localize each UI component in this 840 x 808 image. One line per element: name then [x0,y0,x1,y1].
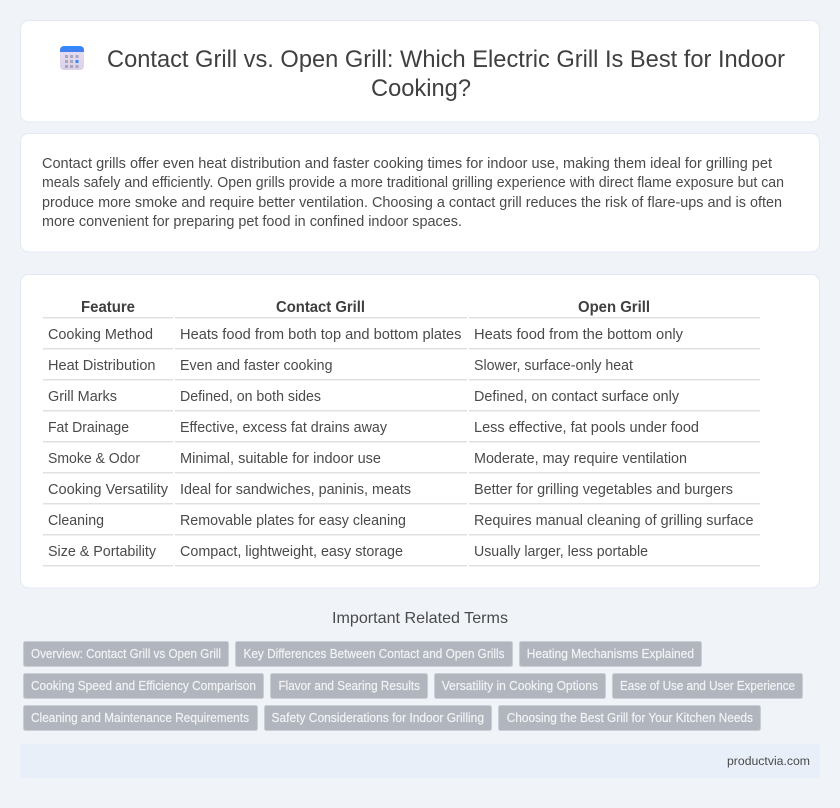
tag: Safety Considerations for Indoor Grilling [272,711,484,725]
tag group: related terms [24,642,802,730]
row: grill marks: Grill Marks [48,389,117,405]
row: smoke and odor [48,451,687,467]
tag [264,706,492,730]
row: size and portability [48,544,648,560]
row: cooking versatility: Ideal for sandwiches, paninis, meats [180,482,411,498]
row: size and portability: Compact, lightweight, easy storage [180,544,403,560]
row: grill marks: Defined, on both sides [180,389,321,405]
tag: Cooking Speed and Efficiency Comparison [31,679,256,693]
title: Cooking? [371,75,471,102]
row: fat drainage [48,420,699,436]
row: cooking method: Heats food from both top and bottom plates [180,327,462,343]
row: fat drainage: Effective, excess fat drains away [180,420,388,436]
tag [270,674,428,698]
row: cleaning [48,513,754,529]
panel: summary text: more convenient for preparing pet food in confined indoor spaces. [42,214,462,230]
table header row: Contact Grill [276,299,365,316]
row: cleaning: Requires manual cleaning of grilling surface [474,513,754,529]
row: cooking versatility: Better for grilling vegetables and burgers [474,482,733,498]
heading: important related terms: Important Related Terms [332,610,508,627]
row: fat drainage: Fat Drainage [48,420,129,436]
tag [434,674,606,698]
row: grill marks [48,389,680,405]
row: cooking method: Heats food from the bottom only [474,327,684,343]
tag [498,706,760,730]
panel: summary text: Contact grills offer even heat distribution and faster cooking times for indoor use, making them ideal for grilling pet [42,156,772,172]
footer bar [20,744,820,778]
row: heat distribution: Heat Distribution [48,358,156,374]
table header row [81,299,650,316]
panel: title header [20,20,820,122]
panel: comparison table [20,274,820,588]
panel: summary text: meals safely and efficiently. Open grills provide a more traditional grilling experience with direct flame exposure but can [42,175,784,191]
title [107,46,785,102]
tag [24,674,264,698]
row: cooking method: Cooking Method [48,327,153,343]
row: fat drainage: Less effective, fat pools under food [474,420,699,436]
row: smoke and odor: Smoke & Odor [48,451,140,467]
row: cleaning: Removable plates for easy cleaning [180,513,406,529]
tag: Cleaning and Maintenance Requirements [31,711,249,725]
row: size and portability: Usually larger, less portable [474,544,648,560]
tag [24,706,258,730]
row: smoke and odor: Minimal, suitable for indoor use [180,451,381,467]
tag: Key Differences Between Contact and Open Grills [244,647,504,661]
tag [236,642,512,666]
tag: Heating Mechanisms Explained [527,647,694,661]
row: heat distribution: Slower, surface-only heat [474,358,633,374]
row: smoke and odor: Moderate, may require ventilation [474,451,687,467]
row: heat distribution [48,358,633,374]
icon: calendar grid [60,46,84,70]
tag [24,642,228,666]
tag: Ease of Use and User Experience [620,679,795,693]
tag [520,642,702,666]
row: grill marks: Defined, on contact surface only [474,389,680,405]
row: heat distribution: Even and faster cooking [180,358,332,374]
row: cleaning: Cleaning [48,513,104,529]
panel: summary text [20,134,820,252]
row: cooking method [48,327,684,343]
footer bar: productvia.com [727,754,810,768]
table header row: Open Grill [578,299,650,316]
tag: Overview: Contact Grill vs Open Grill [31,647,221,661]
tag: Choosing the Best Grill for Your Kitchen Needs [507,711,753,725]
row: cooking versatility: Cooking Versatility [48,482,169,498]
title: Contact Grill vs. Open Grill: Which Electric Grill Is Best for Indoor [107,46,785,73]
row: cooking versatility [48,482,733,498]
row: size and portability: Size & Portability [48,544,157,560]
tag: Versatility in Cooking Options [442,679,598,693]
table header row: Feature [81,299,135,316]
tag: Flavor and Searing Results [278,679,420,693]
tag [612,674,802,698]
panel: summary text: produce more smoke and require better ventilation. Choosing a contact grill reduces the risk of flare-ups and is often [42,195,782,211]
